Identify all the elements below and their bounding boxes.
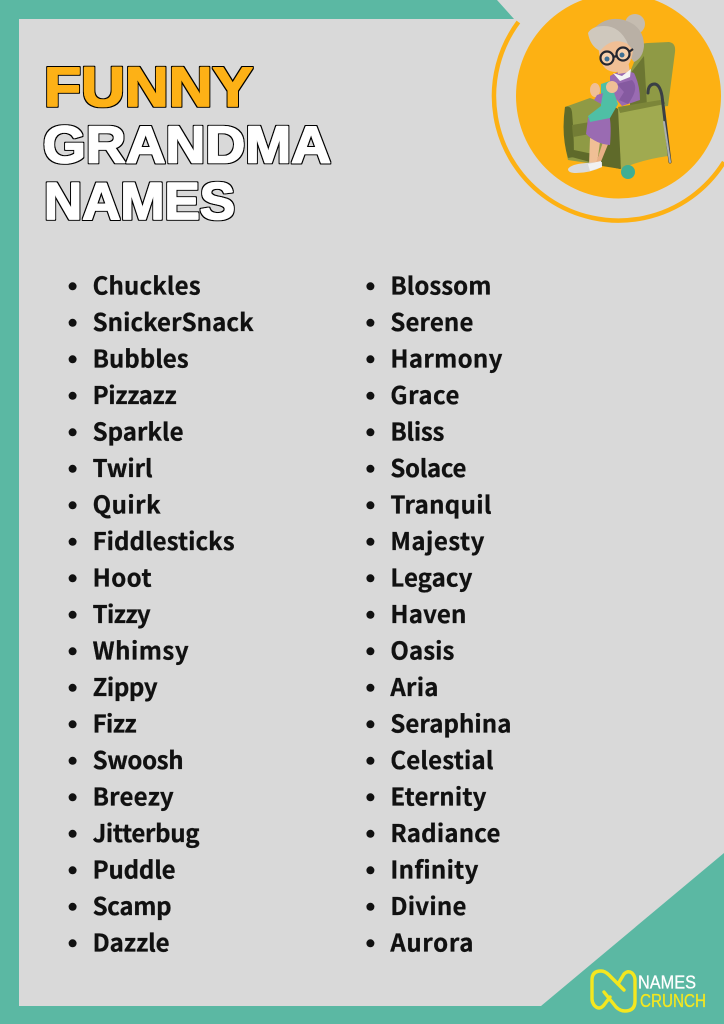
name list: left column: Puddle <box>93 850 176 885</box>
title line: Grandma: GRANDMA <box>43 116 331 174</box>
hands and sleeve <box>590 81 618 104</box>
title line: Names: NAMES <box>44 173 235 231</box>
name list: left column: Whimsy <box>93 631 189 666</box>
logo: Names Crunch: CRUNCH <box>640 991 706 1011</box>
glasses <box>600 48 633 64</box>
name list: left column: Scamp <box>93 887 172 922</box>
name list: left column <box>69 266 254 958</box>
name list: right column: Harmony <box>390 339 503 374</box>
logo mark <box>592 971 635 1011</box>
name list: left column: Fiddlesticks <box>93 522 235 557</box>
name list: left column: Sparkle <box>93 412 184 447</box>
name list: left column: Tizzy <box>93 595 151 630</box>
name list: right column: Serene <box>390 303 473 338</box>
name list: right column: Infinity <box>390 850 479 885</box>
name list: right column <box>366 266 511 958</box>
name list: left column: Quirk <box>93 485 161 520</box>
name list: left column: Pizzazz <box>93 376 177 411</box>
yarn ball <box>621 165 635 179</box>
name list: right column: Majesty <box>390 522 485 557</box>
name list: left column: Bubbles <box>93 339 189 374</box>
portrait circle <box>516 0 721 198</box>
purple torso and arm <box>610 71 640 106</box>
title line: Funny: FUNNY <box>44 55 253 118</box>
armchair <box>564 42 675 169</box>
name list: right column: Legacy <box>390 558 473 593</box>
name list: left column: Zippy <box>93 668 158 703</box>
name list: right column: Aurora <box>389 923 473 958</box>
name list: right column: Haven <box>390 595 466 630</box>
logo wordmark: NAMES <box>638 972 696 992</box>
name list: right column: Seraphina <box>390 704 511 739</box>
name list: right column: Tranquil <box>390 485 492 520</box>
name list: right column: Solace <box>390 449 466 484</box>
decorative ring around portrait <box>494 22 724 221</box>
name list: right column: Bliss <box>390 412 445 447</box>
purple skirt <box>586 112 611 145</box>
name list: left column: Hoot <box>93 558 152 593</box>
collar and neck <box>613 60 631 81</box>
legs and slippers <box>568 138 609 173</box>
name list: right column: Eternity <box>390 777 487 812</box>
illustration: grandma knitting in armchair <box>564 14 675 179</box>
head <box>588 14 645 72</box>
name list: right column: Oasis <box>390 631 455 666</box>
name list: left column: Dazzle <box>93 923 170 958</box>
name list: left column: Twirl <box>93 449 153 484</box>
name list: right column: Aria <box>389 668 438 703</box>
cane <box>648 84 670 162</box>
name list: left column: SnickerSnack <box>93 303 254 338</box>
name list: right column: Blossom <box>390 266 491 301</box>
name list: right column: Divine <box>390 887 466 922</box>
logo: Names Crunch <box>592 971 706 1011</box>
knitting <box>588 81 618 122</box>
name list: right column: Celestial <box>390 741 494 776</box>
title <box>43 55 331 231</box>
name list: right column: Grace <box>390 376 459 411</box>
name list: left column: Swoosh <box>93 741 184 776</box>
name list: left column: Chuckles <box>93 266 201 301</box>
name list: right column: Radiance <box>390 814 500 849</box>
name list: left column: Breezy <box>93 777 174 812</box>
name list: left column: Fizz <box>93 704 137 739</box>
name list: left column: Jitterbug <box>93 814 200 849</box>
